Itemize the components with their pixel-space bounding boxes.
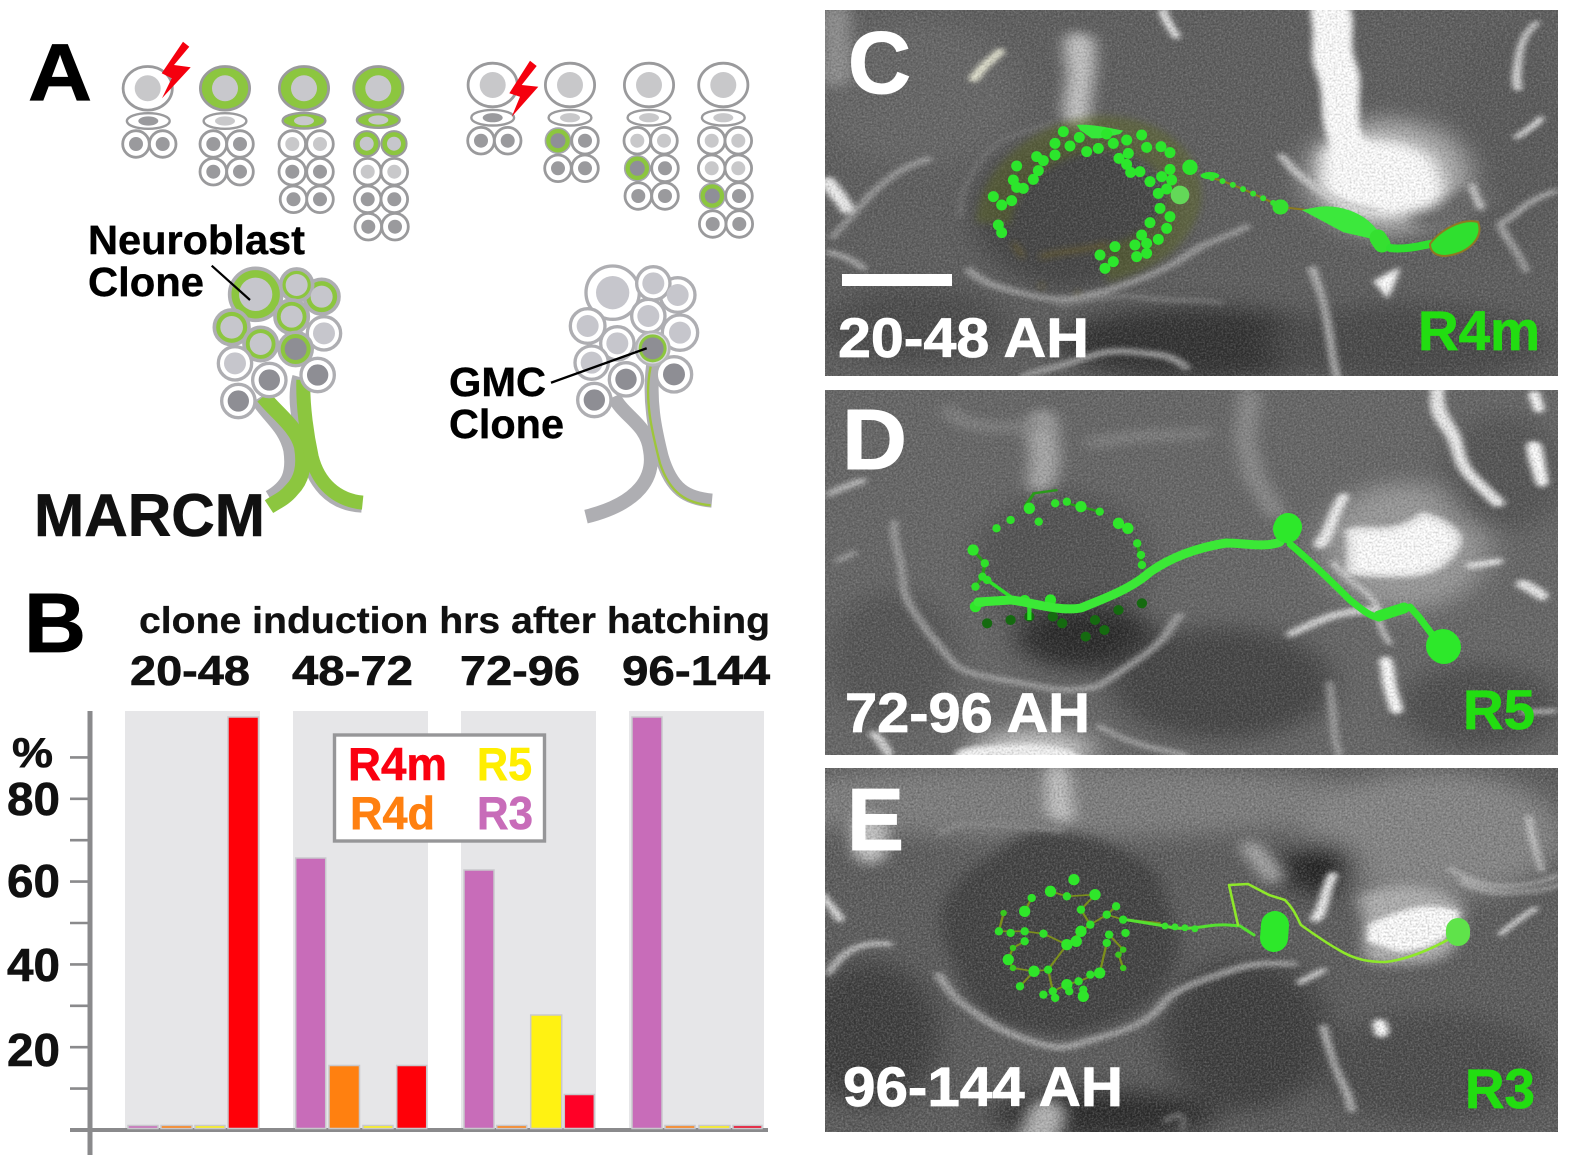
panel A: MARCM diagrams <box>28 28 753 549</box>
legend: R4m <box>348 738 447 790</box>
scale bar <box>842 274 952 286</box>
column headings: 96-144 <box>622 647 771 694</box>
neuron class label R3: R3 <box>1465 1057 1535 1120</box>
GMC stage 3 <box>624 63 678 209</box>
y axis and ticks <box>70 711 768 1155</box>
R4m terminal ring <box>988 125 1219 293</box>
neuroblast clone lineage series <box>123 42 408 240</box>
column headings: 48-72 <box>292 647 413 694</box>
R4m axon and soma <box>1212 178 1480 256</box>
stage 2 <box>200 66 253 185</box>
stage 3 <box>279 66 333 213</box>
chart heading: clone induction hrs after hatching <box>139 600 770 641</box>
grey group backgrounds <box>125 711 764 1130</box>
legend: R4d <box>350 787 435 839</box>
GMC stage 4 <box>698 63 753 237</box>
neuron class label R5: R5 <box>1463 678 1535 741</box>
y axis labels: % <box>12 729 53 776</box>
time label E: 96-144 AH <box>843 1055 1123 1118</box>
panel B: bar chart <box>7 576 771 1155</box>
label: GMC Clone: GMC <box>449 359 546 405</box>
legend: R5 <box>477 738 532 790</box>
labeled neuron R5 <box>967 490 1444 647</box>
GMC stage 1: induction <box>468 63 521 154</box>
micrograph background D <box>825 390 1564 770</box>
micrograph background C <box>814 10 1559 383</box>
panel letter C: C <box>848 13 911 112</box>
column headings: 20-48 <box>130 647 250 694</box>
neuron class label R4m: R4m <box>1418 299 1540 362</box>
stage 1: induction <box>123 66 176 157</box>
GMC stage 2 <box>545 63 598 182</box>
label: MARCM: MARCM <box>34 482 265 549</box>
labeled neuron R3 <box>995 874 1458 1002</box>
micrograph background E <box>825 768 1558 1132</box>
icon: lightning bolt GMC <box>509 61 538 117</box>
legend <box>334 735 544 841</box>
label: GMC Clone <box>449 348 647 447</box>
icon: lightning bolt <box>162 42 191 98</box>
y axis labels: 60 <box>7 855 60 907</box>
time label C: 20-48 AH <box>838 306 1089 369</box>
y axis labels: 40 <box>7 939 60 991</box>
legend: R3 <box>477 787 533 839</box>
stage 4 <box>354 66 408 240</box>
panel letter D: D <box>842 393 907 488</box>
GMC clone lineage series <box>468 61 753 237</box>
R3 terminal beads <box>995 874 1161 1002</box>
panel D: micrograph 72-96 AH <box>825 390 1564 770</box>
bars: 96-144 <box>632 717 762 1128</box>
labeled neuron R4m <box>988 125 1480 293</box>
panel C: micrograph 20-48 AH <box>814 10 1559 383</box>
y axis labels: 80 <box>7 773 60 825</box>
panel E: micrograph 96-144 AH <box>825 768 1558 1132</box>
panel letter A: A <box>28 28 92 118</box>
time label D: 72-96 AH <box>845 681 1090 744</box>
y axis labels <box>7 729 60 1076</box>
R3 axon and somata <box>1128 884 1458 962</box>
neuroblast clone tree <box>214 268 363 507</box>
label: GMC Clone: Clone <box>449 401 564 447</box>
y axis labels: 20 <box>7 1024 60 1076</box>
label: Neuroblast Clone: Neuroblast <box>88 217 305 263</box>
label: Neuroblast Clone: Clone <box>88 259 204 305</box>
panel letter E: E <box>847 770 904 869</box>
bars: 20-48 <box>128 717 258 1128</box>
GMC clone tree <box>570 266 712 517</box>
label: Neuroblast Clone <box>88 217 305 305</box>
R5 axon and somata <box>978 527 1444 647</box>
R5 terminal beads <box>967 490 1147 642</box>
panel letter B: B <box>24 576 86 670</box>
column headings <box>130 647 771 694</box>
bars: 48-72 <box>296 858 427 1128</box>
bars: 72-96 <box>464 870 594 1128</box>
column headings: 72-96 <box>460 647 580 694</box>
